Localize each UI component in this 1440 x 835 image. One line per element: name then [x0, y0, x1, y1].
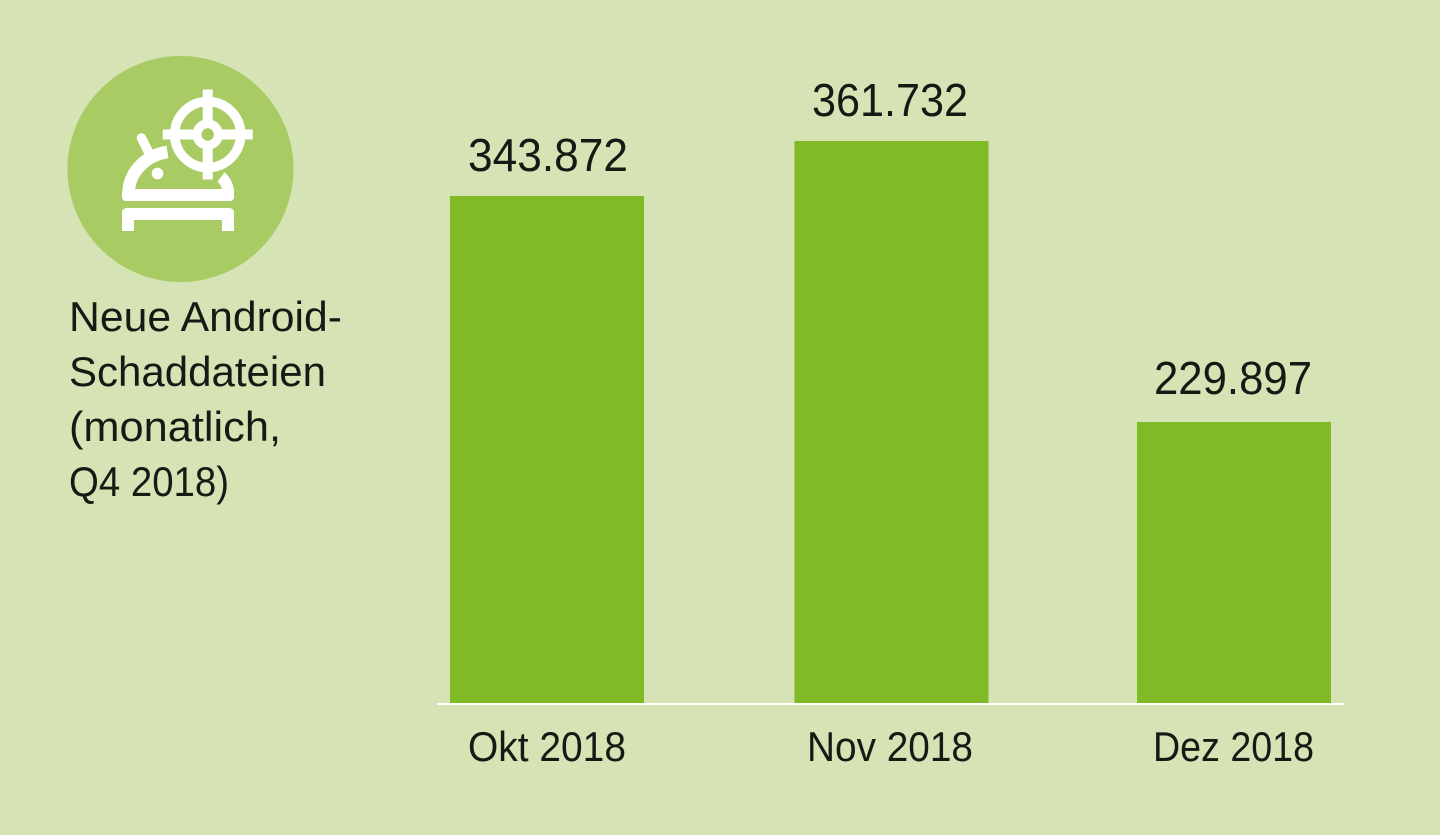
bar: Okt 2018: 343.872	[468, 129, 628, 181]
bar: Nov 2018: Nov 2018	[807, 723, 973, 770]
heading: chart description: Schaddateien	[69, 348, 326, 395]
bar: Dez 2018	[1137, 352, 1331, 770]
bar: Nov 2018: 361.732	[812, 74, 968, 126]
bar: Dez 2018: 229.897	[1154, 352, 1312, 404]
heading: chart description: (monatlich,	[69, 403, 281, 450]
bar chart	[437, 74, 1344, 770]
bar: Nov 2018	[794, 74, 988, 770]
heading: chart description: Neue Android-	[69, 293, 342, 340]
bar: Dez 2018: Dez 2018	[1153, 723, 1314, 770]
chart baseline	[437, 703, 1344, 705]
bar: Okt 2018	[450, 129, 644, 770]
heading: chart description	[69, 293, 342, 505]
bar: Okt 2018: Okt 2018	[468, 723, 626, 770]
icon: android with target crosshair	[68, 56, 294, 282]
heading: chart description: Q4 2018)	[69, 458, 229, 505]
